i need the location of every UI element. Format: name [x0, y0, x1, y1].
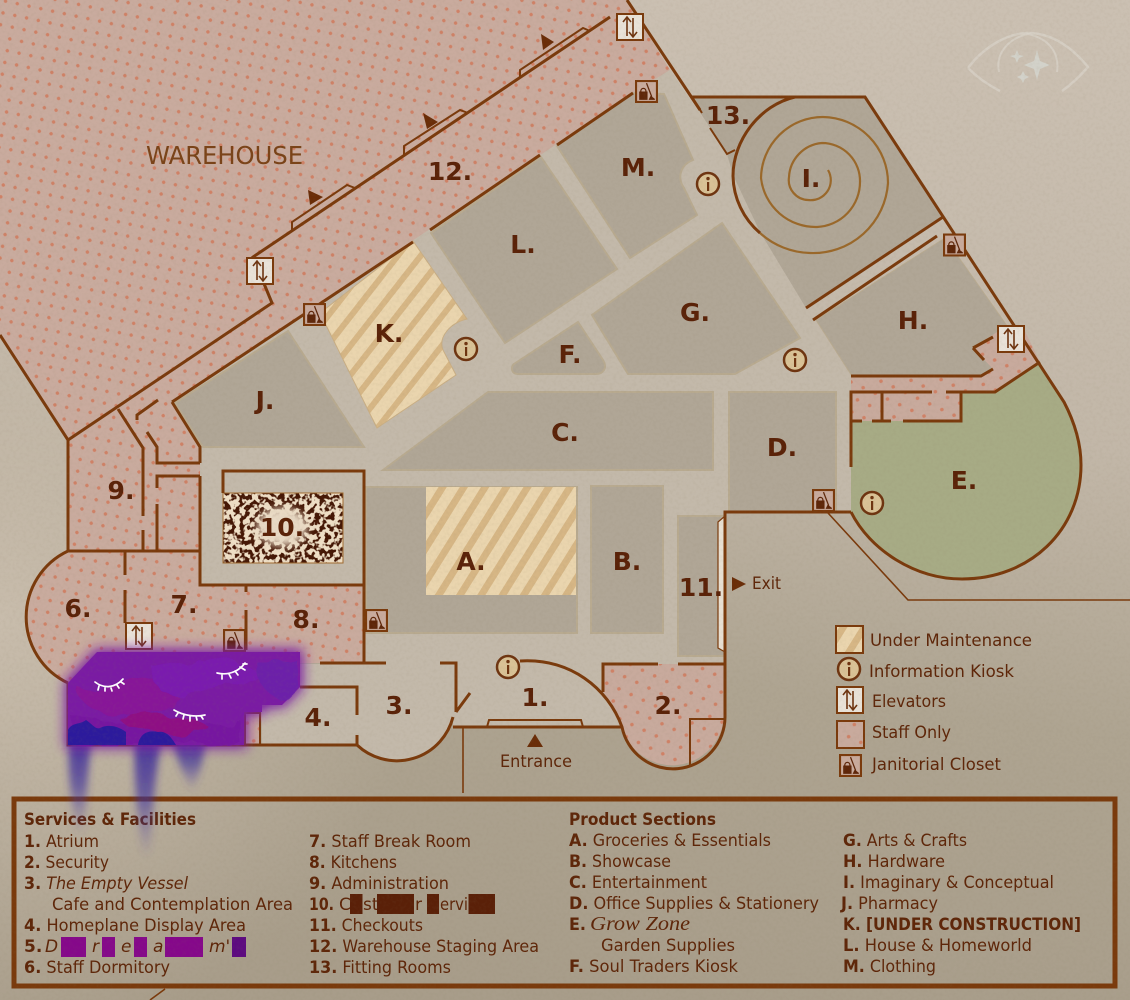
map labels: A. [456, 547, 486, 576]
shop I and fitting rooms [690, 97, 943, 308]
column: services and facilities: 5. [24, 937, 42, 957]
icon: sigil eye [968, 33, 1088, 91]
column: product sections continued: I. Imaginary & Conceptual [843, 873, 1054, 893]
column: product sections continued: K. [UNDER CONSTRUCTION] [843, 915, 1081, 935]
column: services continued: 11. Checkouts [309, 916, 423, 936]
column: product sections: E. [569, 915, 586, 935]
map labels: 13. [706, 101, 750, 130]
checkout door [718, 516, 725, 652]
exit marker: Exit [752, 574, 781, 594]
purple dream blob [68, 652, 300, 858]
column: services continued: 13. Fitting Rooms [309, 958, 451, 978]
column: services and facilities: a [153, 937, 163, 957]
column: services continued: 9. Administration [309, 874, 449, 894]
column: services and facilities: 2. Security [24, 853, 109, 873]
column: services and facilities: r [92, 937, 100, 957]
icon: elevators [126, 14, 1024, 649]
column: services continued: r [415, 895, 422, 915]
column: product sections continued: G. Arts & Crafts [843, 831, 967, 851]
column: product sections continued: L. House & Homeworld [843, 936, 1032, 956]
walls [0, 0, 1081, 769]
shop G [592, 223, 800, 374]
shop sections [175, 93, 1081, 656]
column: services and facilities: m' [209, 937, 230, 957]
legend: map key [836, 626, 1032, 776]
column: services and facilities: e [121, 937, 131, 957]
swatch: information kiosk: Information Kiosk [869, 662, 1014, 682]
column: services continued: 12. Warehouse Staging Area [309, 937, 539, 957]
panel: legend box [14, 799, 1115, 986]
warehouse heading: WAREHOUSE [146, 141, 303, 170]
swatch: under maintenance [836, 626, 1032, 653]
column: product sections: A. Groceries & Essentials [569, 831, 771, 851]
column: product sections: B. Showcase [569, 852, 671, 872]
zone: hardware staff corridor [851, 325, 1040, 421]
swatch: staff only: Staff Only [872, 723, 951, 743]
eye: closed right [217, 663, 247, 679]
map labels: 10. [260, 513, 304, 542]
icon: janitor closets [224, 81, 965, 651]
dock arrows [308, 34, 554, 205]
swatch: janitorial closet: Janitorial Closet [871, 755, 1001, 775]
swatch: elevators: Elevators [872, 692, 946, 712]
map labels: D. [767, 433, 797, 462]
map labels: 3. [386, 691, 412, 720]
column: services and facilities: 1. Atrium [24, 832, 99, 852]
shop B [591, 486, 663, 633]
map labels: F. [559, 340, 581, 369]
shop D [729, 392, 836, 512]
column: product sections [569, 810, 819, 977]
checkouts [678, 516, 725, 656]
warehouse loading docks [292, 28, 590, 230]
shop L [431, 157, 617, 343]
map labels [65, 101, 977, 732]
column: product sections: D. Office Supplies & Stationery [569, 894, 819, 914]
column: product sections continued: J. Pharmacy [840, 894, 938, 914]
swatch: information kiosk [838, 658, 1014, 682]
shop C [383, 392, 713, 470]
map labels: K. [375, 319, 403, 348]
icon: information kiosks [455, 173, 883, 678]
column: services and facilities: Services & Facilities [24, 810, 196, 830]
shop A [366, 487, 577, 633]
map labels: 2. [655, 691, 681, 720]
elevators, janitor and info icons [126, 14, 1024, 678]
map labels: 1. [522, 683, 548, 712]
column: services continued: 8. Kitchens [309, 853, 397, 873]
column: services and facilities: Cafe and Contemplation Area [52, 895, 293, 915]
map labels: 11. [679, 573, 723, 602]
column: services continued: C [339, 895, 351, 915]
shop A maintenance [426, 487, 576, 595]
exit marker [732, 574, 781, 594]
column: product sections: Product Sections [569, 810, 716, 830]
customer service noise panel [223, 493, 343, 563]
column: services and facilities: 3. The Empty Vessel [24, 874, 188, 894]
map labels: H. [898, 306, 928, 335]
column: services continued: ervi [440, 895, 468, 915]
map labels: 12. [428, 157, 472, 186]
map labels: I. [802, 164, 820, 193]
map labels: M. [621, 153, 655, 182]
floor walkways [172, 70, 851, 761]
spiral of section I [733, 97, 888, 253]
swatch: staff only [837, 721, 951, 748]
swatch: elevators [837, 687, 946, 713]
column: product sections: Garden Supplies [601, 936, 735, 956]
shop F [512, 322, 605, 374]
column: services and facilities [24, 810, 293, 978]
column: product sections continued [840, 831, 1081, 977]
column: services continued [309, 832, 539, 978]
column: services continued: st [363, 895, 379, 915]
map labels: B. [613, 547, 641, 576]
column: product sections continued: H. Hardware [843, 852, 945, 872]
map labels: C. [551, 418, 579, 447]
eye: closed left [95, 679, 124, 691]
shop H [816, 238, 1010, 376]
shop K under construction [320, 241, 467, 428]
entrance marker [500, 734, 572, 772]
panel: staff only zones and warehouse [0, 0, 724, 765]
small staff closet [245, 713, 260, 745]
column: services continued: 7. Staff Break Room [309, 832, 471, 852]
zone E garden [851, 362, 1081, 579]
column: product sections: F. Soul Traders Kiosk [569, 957, 738, 977]
shop M [557, 93, 697, 258]
ground boundary lines [150, 513, 1130, 1000]
map labels: J. [254, 386, 274, 415]
map labels: E. [951, 466, 977, 495]
column: services continued: 10. [309, 895, 334, 915]
map labels: 4. [305, 703, 331, 732]
column: services and facilities: 4. Homeplane Display Area [24, 916, 246, 936]
eye: closed center [174, 710, 205, 721]
map labels: 9. [108, 476, 134, 505]
entrance marker: Entrance [500, 752, 572, 772]
column: product sections: C. Entertainment [569, 873, 707, 893]
column: services and facilities: 6. Staff Dormitory [24, 958, 170, 978]
map labels: G. [680, 298, 710, 327]
swatch: under maintenance: Under Maintenance [870, 631, 1032, 651]
map labels: 8. [293, 605, 319, 634]
map labels: 7. [171, 590, 197, 619]
zone: security [603, 664, 724, 765]
map labels: L. [510, 230, 536, 259]
map labels: 6. [65, 594, 91, 623]
column: services and facilities: D [45, 937, 58, 957]
column: product sections: Grow Zone [590, 913, 690, 935]
column: product sections continued: M. Clothing [843, 957, 936, 977]
shop J [175, 331, 364, 447]
